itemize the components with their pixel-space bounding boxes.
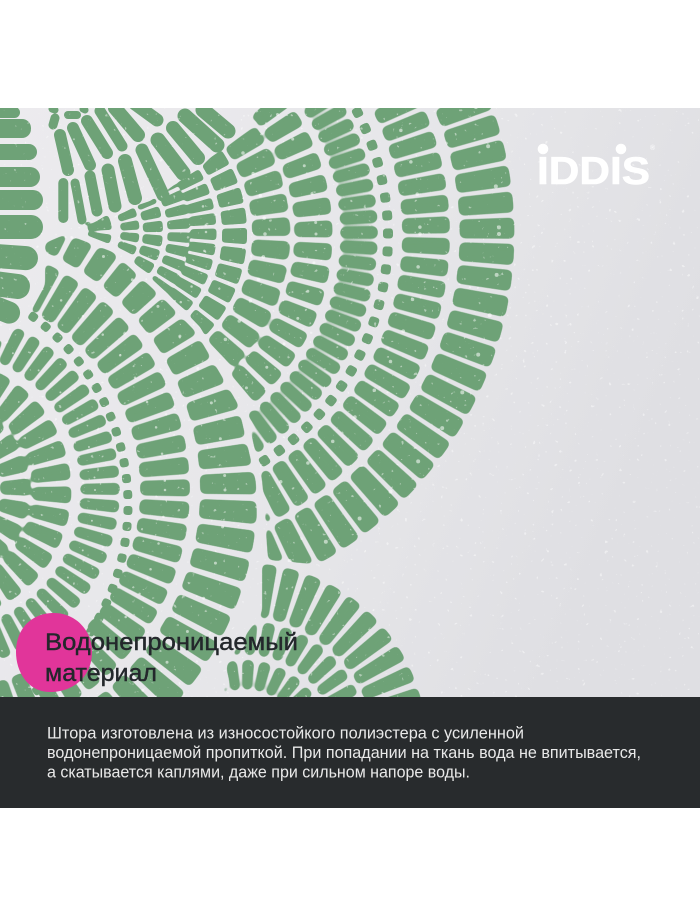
infographic canvas — [0, 108, 700, 808]
logo: IDDIS: ® — [650, 144, 656, 152]
description text: водонепроницаемой пропиткой. При попадании на ткань вода не впитывается, — [47, 744, 641, 762]
pattern: bottom fan — [224, 564, 420, 697]
heading: материал — [45, 660, 157, 687]
pattern: main fan, large outer rings — [209, 108, 514, 564]
pattern: far-left fan — [0, 107, 43, 327]
fabric background — [0, 108, 700, 697]
dark description band — [0, 697, 700, 808]
photo panel: wet fabric with green pattern — [0, 108, 700, 697]
heading: Водонепроницаемый — [45, 629, 298, 656]
pattern: upper-left long pills — [52, 104, 228, 220]
heading — [45, 629, 298, 687]
pink accent blob — [16, 613, 92, 692]
pattern: lower-left fan, small dot ring — [28, 312, 132, 696]
pattern: lower-left fan, outer rings — [0, 236, 257, 697]
description text: Штора изготовлена из износостойкого полиэстера с усиленной — [47, 724, 524, 742]
logo: IDDIS: IDDIS — [537, 150, 650, 193]
description text — [47, 724, 641, 782]
scattered droplets on fabric — [0, 108, 700, 697]
water droplets on pattern — [12, 108, 501, 692]
description text: а скатывается каплями, даже при сильном напоре воды. — [47, 764, 470, 782]
pattern: main fan, small inner rings — [85, 108, 393, 466]
